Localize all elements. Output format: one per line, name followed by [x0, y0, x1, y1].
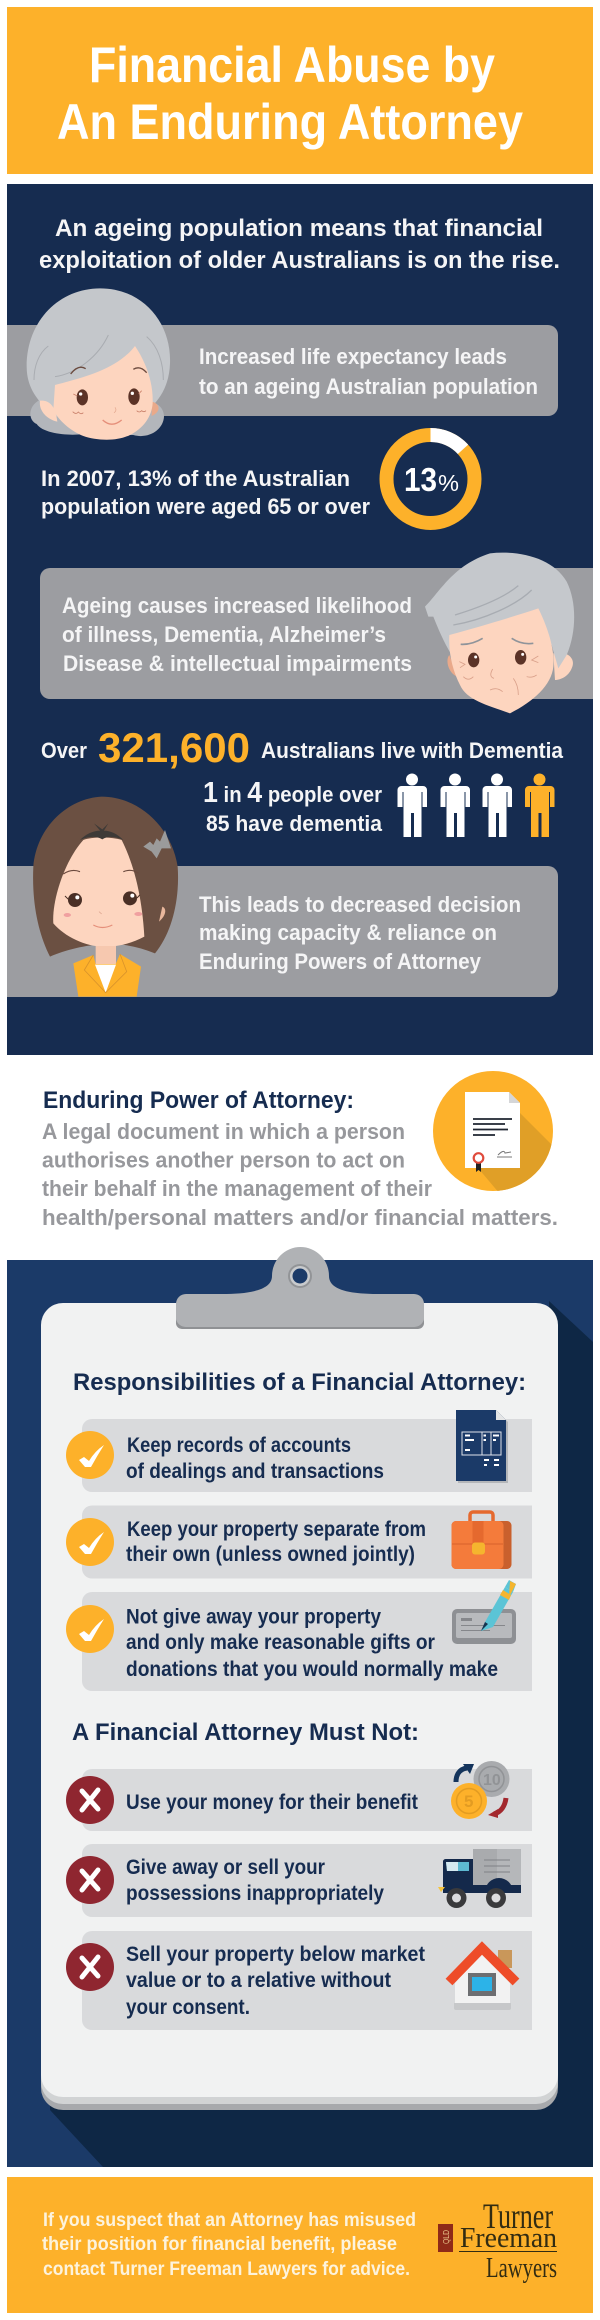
callout: illness bar: Disease & intellectual impairments: [63, 651, 412, 676]
list item: not give away property: and only make reasonable gifts or: [126, 1631, 435, 1654]
list item: sell property: value or to a relative without: [126, 1969, 391, 1992]
footer text: If you suspect that an Attorney has misused: [43, 2209, 416, 2231]
text: 2007 statistic: [41, 466, 370, 519]
list item: sell property: Sell your property below market: [126, 1943, 425, 1966]
icon: coins: [451, 1761, 510, 1819]
panel: footer call to action: [7, 2177, 593, 2313]
title: Financial Abuse by: [89, 37, 495, 93]
text: 321,600 statistic: Over: [41, 738, 87, 763]
logo: Turner Freeman Lawyers: Turner: [483, 2196, 553, 2236]
list item: keep records: [66, 1410, 532, 1492]
icon: coins: 10: [483, 1772, 501, 1789]
callout: life expectancy bar: [7, 325, 558, 416]
callout: decision making bar: Enduring Powers of Attorney: [199, 949, 482, 974]
title: [57, 37, 523, 150]
panel: ageing population: [7, 184, 593, 1055]
logo: Turner Freeman Lawyers: Lawyers: [486, 2253, 557, 2284]
list item: use money: Use your money for their benefit: [126, 1791, 418, 1814]
title: An Enduring Attorney: [57, 94, 523, 150]
definition text: authorises another person to act on: [42, 1148, 405, 1172]
definition text: [42, 1119, 558, 1230]
icon: coins: 5: [464, 1792, 473, 1811]
definition text: health/personal matters and/or financial matters.: [42, 1205, 558, 1230]
text: 321,600 statistic: 321,600: [98, 724, 250, 771]
intro text: exploitation of older Australians is on the rise.: [39, 247, 560, 274]
list item: give away possessions: [66, 1844, 532, 1917]
list item: use money: [66, 1761, 532, 1831]
callout: decision making bar: making capacity & reliance on: [199, 920, 497, 945]
icon: woman with jacket: [33, 797, 178, 997]
callout: life expectancy bar: Increased life expectancy leads: [199, 344, 507, 369]
icon: legal document: [433, 1071, 553, 1191]
icon: cheque and pen: [452, 1580, 516, 1644]
callout: illness bar: Ageing causes increased likelihood: [62, 593, 412, 618]
intro text: [39, 215, 560, 274]
list item: give away possessions: Give away or sell your: [126, 1856, 325, 1879]
definition text: A legal document in which a person: [42, 1119, 405, 1144]
chart: 13 percent donut: %: [438, 470, 459, 496]
intro text: An ageing population means that financial: [55, 215, 543, 242]
heading: responsibilities: Responsibilities of a Financial Attorney:: [73, 1369, 526, 1396]
footer text: their position for financial benefit, please: [42, 2233, 397, 2255]
icon: briefcase: [452, 1512, 512, 1569]
list item: not give away property: Not give away your property: [126, 1606, 381, 1628]
list item: sell property: your consent.: [126, 1996, 250, 2019]
callout: life expectancy bar: to an ageing Australian population: [199, 374, 538, 399]
footer text: [42, 2209, 416, 2280]
logo: Turner Freeman Lawyers: [438, 2196, 557, 2284]
clipboard clip: [176, 1247, 424, 1329]
callout: decision making bar: [7, 866, 558, 997]
text: 1 in 4 statistic: 85 have dementia: [206, 811, 383, 836]
text: 2007 statistic: In 2007, 13% of the Australian: [41, 466, 350, 491]
logo: Turner Freeman Lawyers: Freeman: [460, 2222, 557, 2254]
list item: keep records: Keep records of accounts: [127, 1434, 351, 1457]
list item: keep records: of dealings and transactions: [126, 1460, 384, 1483]
panel: title banner: [7, 7, 593, 174]
paper stack: [41, 1303, 558, 2110]
icon: delivery truck: [438, 1849, 521, 1908]
callout: decision making bar: This leads to decreased decision: [199, 892, 521, 917]
text: 321,600 statistic: Australians live with Dementia: [261, 738, 564, 763]
icon: people pictogram: [398, 774, 554, 837]
icon: accounts document: [456, 1410, 508, 1483]
list item: give away possessions: possessions inappropriately: [126, 1882, 384, 1905]
list item: keep property separate: [66, 1506, 532, 1578]
list item: sell property: [66, 1931, 532, 2030]
footer text: contact Turner Freeman Lawyers for advice.: [43, 2258, 410, 2280]
text: 1 in 4 statistic: [203, 777, 383, 836]
chart: 13 percent donut: 13: [404, 461, 437, 498]
text: 1 in 4 statistic: 1 in 4 people over: [203, 777, 382, 809]
panel: clipboard background: [7, 1247, 593, 2167]
callout: illness bar: [40, 568, 593, 699]
list item: not give away property: donations that you would normally make: [126, 1658, 498, 1681]
panel: enduring power of attorney definition: [42, 1071, 560, 1230]
chart: 13 percent donut: [386, 435, 474, 523]
icon: grandfather face: [425, 553, 574, 713]
heading: Enduring Power of Attorney:: [43, 1087, 354, 1114]
icon: house: [449, 1948, 516, 2010]
text: 2007 statistic: population were aged 65 or over: [41, 494, 370, 519]
icon: grandmother face: [27, 288, 170, 440]
heading: must not: A Financial Attorney Must Not:: [72, 1719, 419, 1746]
definition text: their behalf in the management of their: [42, 1176, 432, 1201]
callout: illness bar: of illness, Dementia, Alzheimer’s: [62, 622, 386, 647]
list item: keep property separate: their own (unless owned jointly): [126, 1543, 415, 1566]
list item: not give away property: [66, 1580, 532, 1691]
logo: Turner Freeman Lawyers: QLD: [442, 2230, 451, 2244]
list item: keep property separate: Keep your property separate from: [127, 1518, 426, 1541]
text: 321,600 statistic: [41, 724, 564, 771]
